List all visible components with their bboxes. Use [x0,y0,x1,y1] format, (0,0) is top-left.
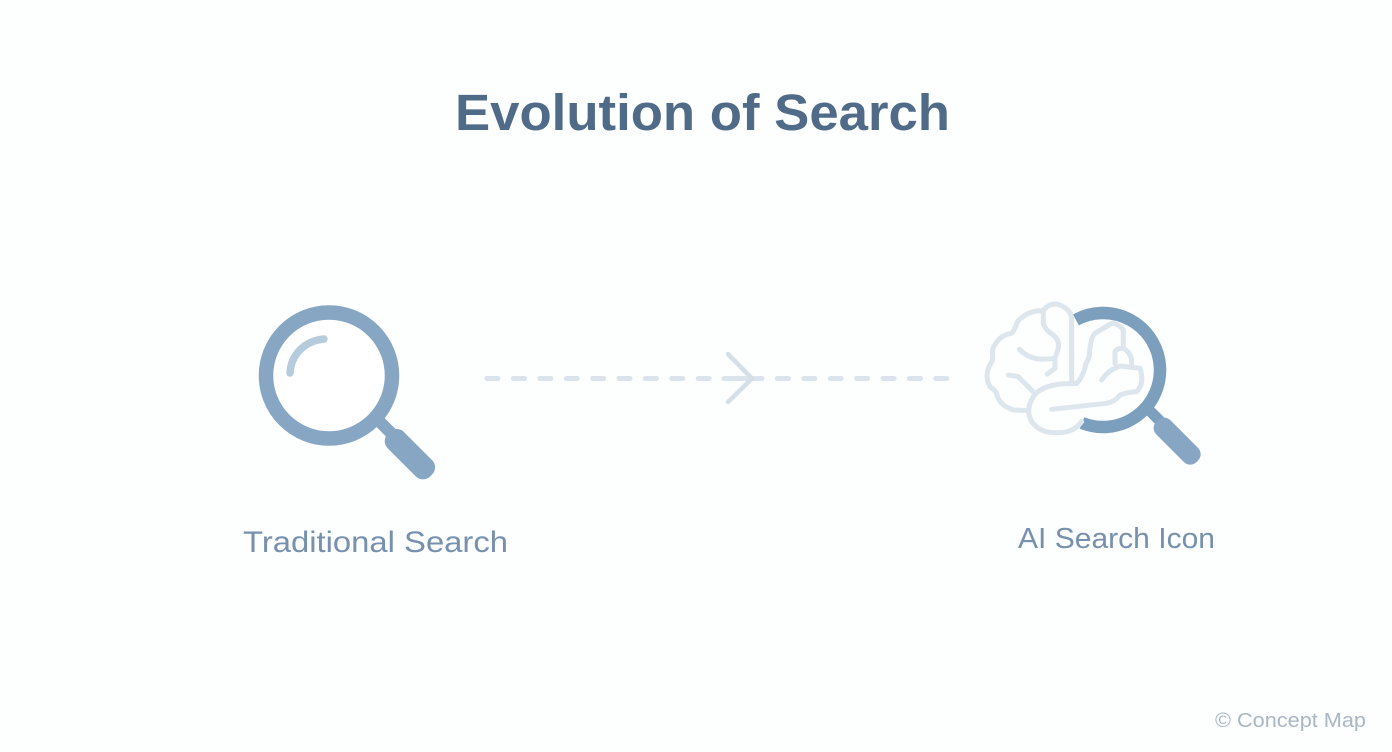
magnifier handle [1148,409,1204,468]
title: Evolution of Search [455,84,950,141]
label: traditional search: Traditional Search [243,526,508,559]
magnifier ring [1076,313,1160,427]
icon: traditional search magnifying glass [266,312,439,484]
arrow: dashed transition [487,354,947,402]
brain outline [987,304,1142,433]
footer credit: © Concept Map [1215,710,1366,732]
icon: AI search brain and magnifying glass [987,304,1204,468]
label: AI search icon: AI Search Icon [1018,523,1215,555]
